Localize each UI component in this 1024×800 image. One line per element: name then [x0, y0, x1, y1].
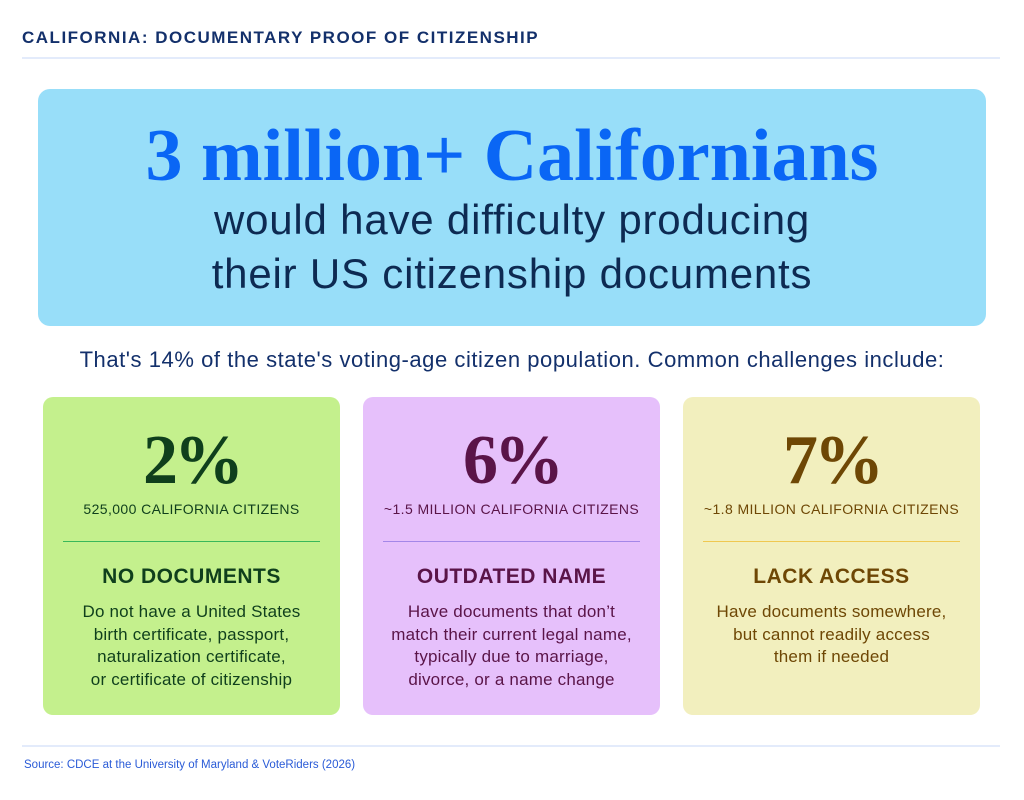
panel: no documents: Do not have a United States [82, 602, 301, 621]
hero headline: 3 million+ Californians [146, 115, 878, 197]
panel: outdated name: match their current legal name, [391, 624, 632, 644]
panel: outdated name: OUTDATED NAME [417, 565, 606, 588]
panel: lack access: Have documents somewhere, [717, 602, 946, 621]
panel: lack access: but cannot readily access [733, 624, 930, 644]
panel: no documents: or certificate of citizenship [91, 670, 292, 688]
panel: lack access: them if needed [774, 647, 889, 666]
panel: no documents: 2% [143, 422, 240, 499]
panel: outdated name [363, 397, 660, 715]
panel: outdated name: Have documents that don’t [408, 602, 615, 621]
source note: Source: CDCE at the University of Maryland & VoteRiders (2026) [24, 759, 355, 771]
header title: CALIFORNIA: DOCUMENTARY PROOF OF CITIZENSHIP [22, 28, 539, 47]
hero subtitle [212, 196, 812, 297]
panel: lack access: LACK ACCESS [753, 565, 910, 588]
panel: lack access: ~1.8 MILLION CALIFORNIA CITIZENS [704, 501, 959, 517]
hero subtitle: their US citizenship documents [212, 250, 812, 297]
panel: lack access [683, 397, 980, 715]
panel: outdated name: typically due to marriage, [414, 647, 609, 666]
panel: lack access: 7% [783, 422, 880, 499]
panel: no documents: NO DOCUMENTS [102, 565, 281, 588]
hero panel [38, 89, 986, 326]
panel: no documents: naturalization certificate, [97, 647, 286, 666]
panel: outdated name: 6% [463, 422, 560, 499]
panel: no documents: birth certificate, passport, [94, 624, 289, 644]
hero subtitle: would have difficulty producing [214, 196, 810, 243]
intro sentence: That's 14% of the state's voting-age citizen population. Common challenges include: [80, 347, 944, 372]
panel: outdated name: divorce, or a name change [408, 670, 615, 688]
panel: no documents: 525,000 CALIFORNIA CITIZENS [83, 501, 300, 517]
panel: outdated name: ~1.5 MILLION CALIFORNIA CITIZENS [384, 501, 639, 517]
panel: no documents [43, 397, 340, 715]
